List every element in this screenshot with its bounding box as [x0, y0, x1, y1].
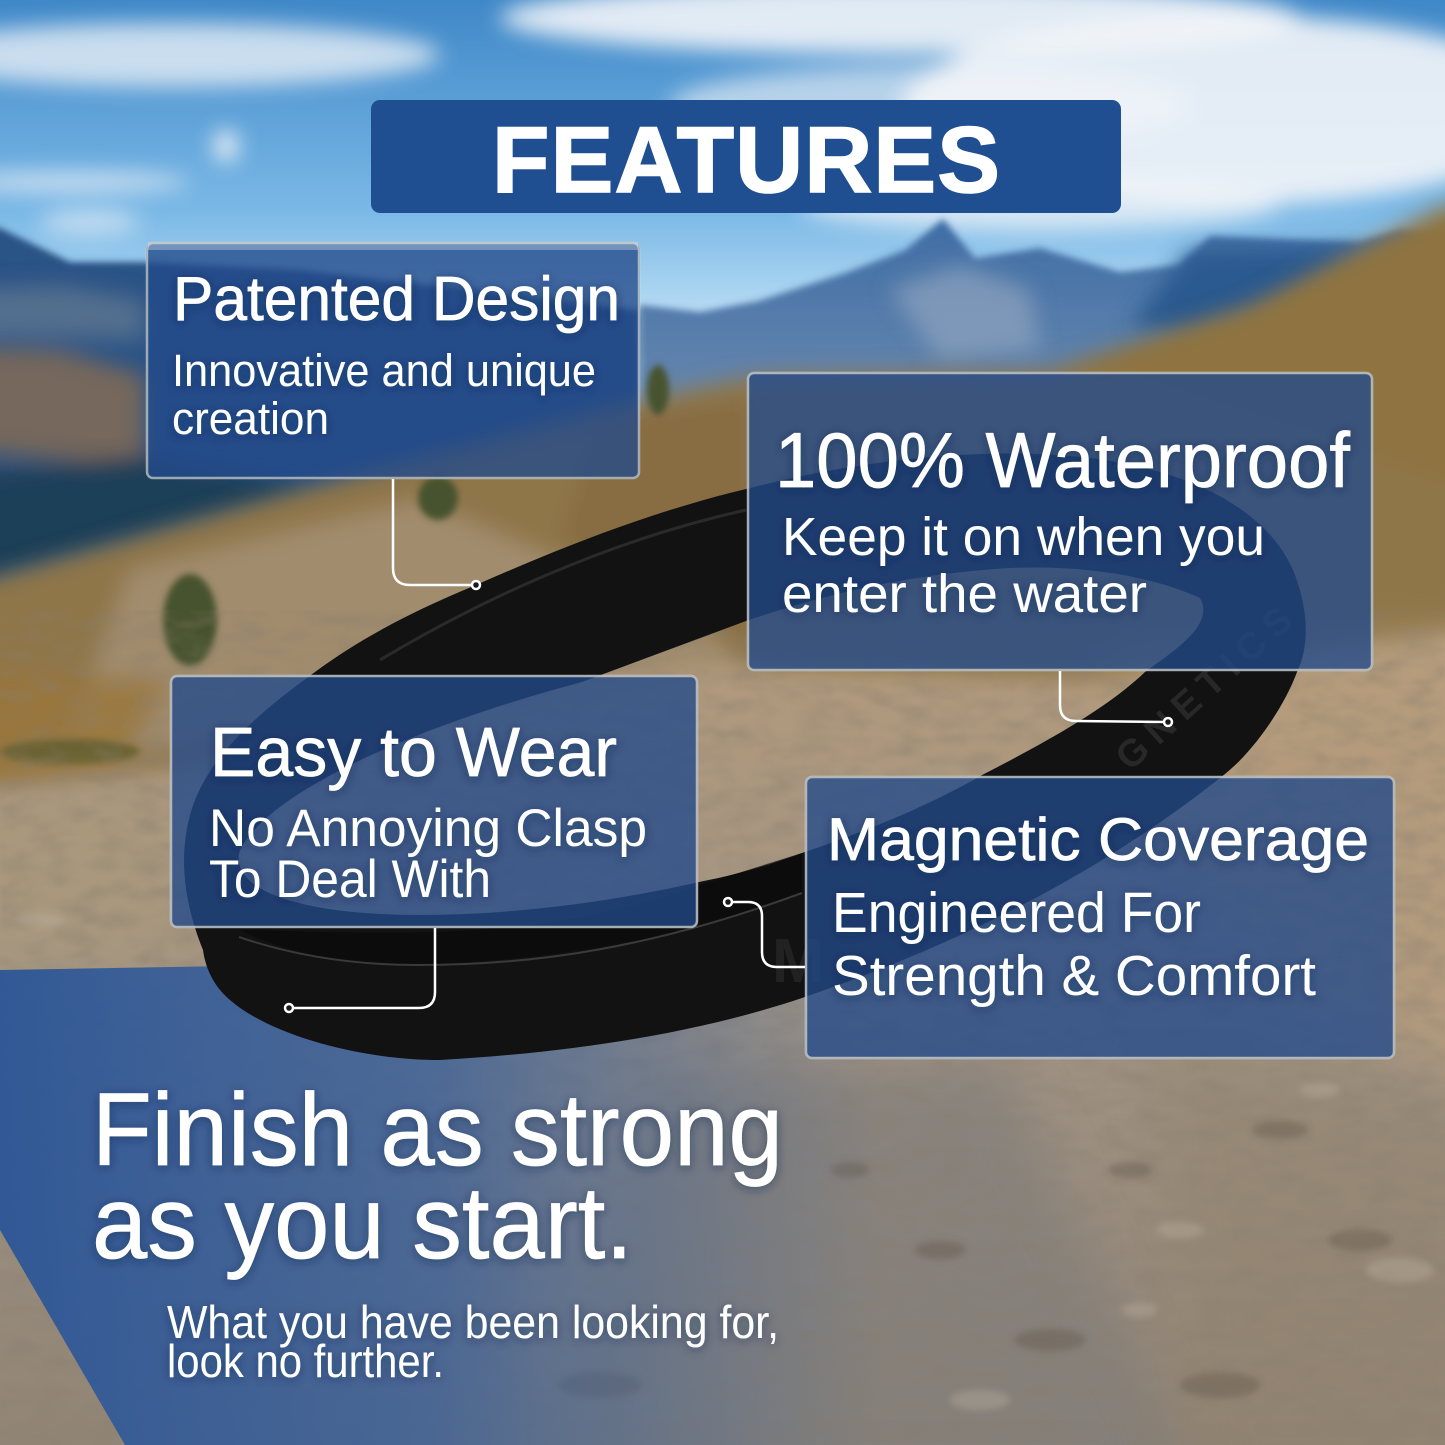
- bottom left blue wedge: [0, 966, 880, 1445]
- heading: Patented Design: [173, 265, 620, 334]
- description: enter the water: [782, 564, 1147, 624]
- panel: header: [371, 100, 1121, 213]
- description: Innovative and unique: [172, 345, 596, 396]
- subtext: look no further.: [167, 1335, 444, 1387]
- description: To Deal With: [209, 850, 491, 909]
- tagline: [92, 1072, 783, 1280]
- subtext: What you have been looking for,: [167, 1296, 779, 1348]
- connector: magnetic coverage: [724, 898, 805, 967]
- trees: [0, 365, 669, 765]
- description: [172, 345, 596, 444]
- connector: waterproof: [1060, 671, 1172, 726]
- panel: magnetic coverage: [805, 776, 1395, 1059]
- band body: [184, 454, 1306, 1060]
- band inner shadow: [240, 853, 802, 965]
- panel: waterproof: [747, 372, 1373, 671]
- connector: patented design: [393, 479, 480, 589]
- gravel stones: [16, 913, 1434, 1410]
- panel: patented design: [146, 242, 640, 479]
- embossed brand text: GNETICS: [1108, 599, 1301, 779]
- description: [209, 799, 647, 909]
- sky: [0, 0, 1445, 420]
- description: Engineered For: [832, 881, 1201, 945]
- heading: Magnetic Coverage: [827, 806, 1369, 873]
- title: FEATURES: [492, 107, 1000, 212]
- gravel trail: [0, 625, 1445, 1445]
- band back highlight: [380, 510, 746, 660]
- subtext: [167, 1296, 779, 1387]
- description: No Annoying Clasp: [209, 799, 647, 858]
- product: black magnetic band: [184, 454, 1306, 1060]
- gravel texture: [0, 610, 1445, 1445]
- tagline: Finish as strong: [92, 1072, 783, 1187]
- distant mountains: [0, 219, 1445, 600]
- tagline: as you start.: [92, 1165, 633, 1280]
- description: [832, 881, 1316, 1008]
- description: Strength & Comfort: [832, 944, 1316, 1008]
- description: [782, 507, 1265, 624]
- band ridge: [239, 893, 802, 965]
- heading: 100% Waterproof: [775, 416, 1350, 504]
- description: Keep it on when you: [782, 507, 1265, 567]
- hills: [0, 205, 1445, 800]
- description: creation: [172, 393, 329, 444]
- embossed letter: M: [772, 927, 824, 996]
- heading: Easy to Wear: [210, 713, 617, 791]
- clouds: [0, 0, 1445, 234]
- connector: easy to wear: [285, 928, 435, 1012]
- panel: easy to wear: [170, 675, 698, 928]
